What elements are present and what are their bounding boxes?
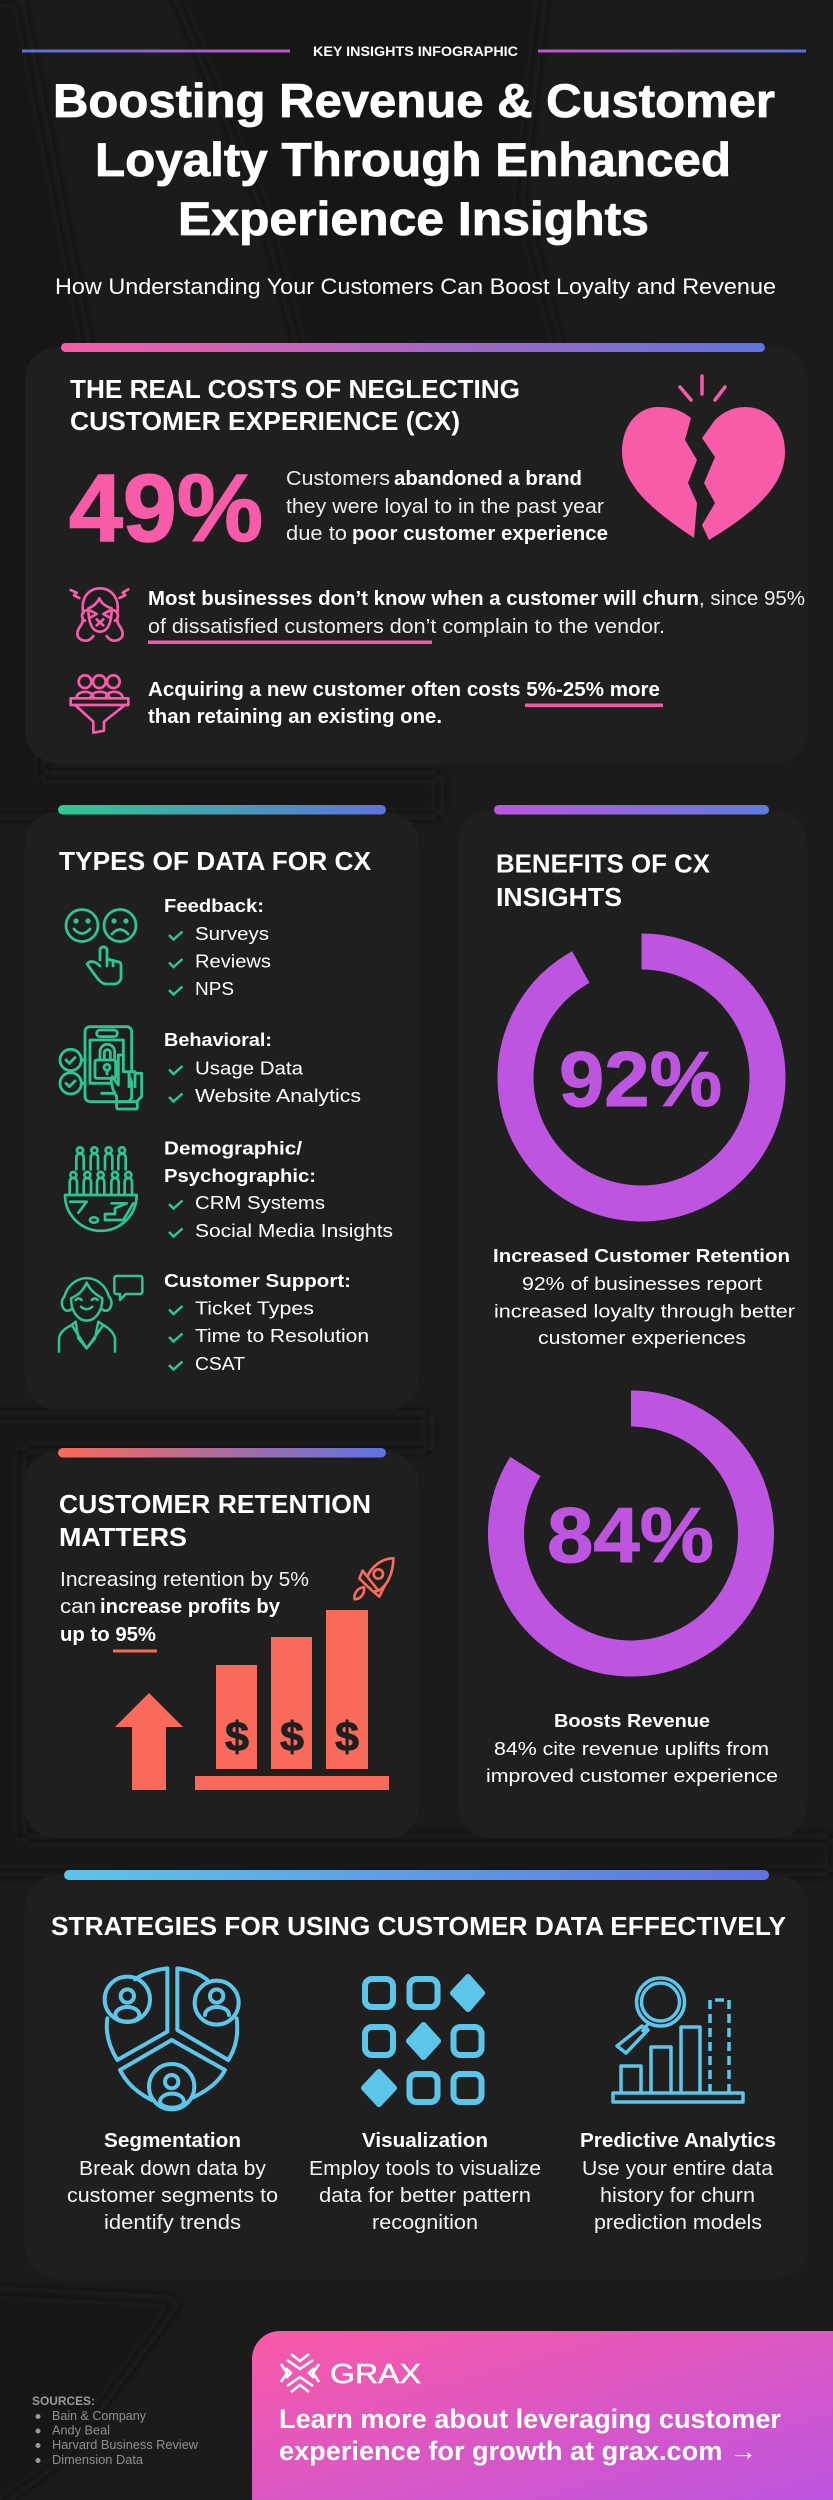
- panel: types of data: [25, 805, 419, 1410]
- icon: customer support: [59, 1276, 142, 1352]
- panel: real costs: [25, 343, 808, 763]
- callout: acquisition cost: [148, 679, 663, 728]
- heading: benefits: [496, 848, 711, 912]
- list: customer support: Ticket Types: [195, 1298, 314, 1318]
- callout: acquisition cost: than retaining an existing one.: [148, 706, 442, 728]
- text: predictive analytics: prediction models: [594, 2212, 762, 2234]
- icon: broken heart: [622, 376, 785, 540]
- text: predictive analytics: [580, 2130, 776, 2234]
- chart: 92% donut: 92%: [559, 1035, 722, 1123]
- text: boosts revenue: Boosts Revenue: [554, 1711, 710, 1731]
- text: segmentation: customer segments to: [67, 2185, 278, 2207]
- chart: 84% donut: 84%: [547, 1491, 714, 1579]
- heading: benefits: BENEFITS OF CX: [496, 848, 711, 878]
- list: feedback: Surveys: [195, 924, 269, 944]
- logo: GRAX: [281, 2354, 421, 2392]
- list: customer support: [164, 1271, 369, 1374]
- text: visualization: Visualization: [362, 2130, 488, 2152]
- icon: behavioral: [60, 1027, 142, 1109]
- callout: churn: [148, 588, 805, 644]
- heading: retention: [59, 1489, 371, 1552]
- text: boosts revenue: improved customer experience: [486, 1766, 778, 1786]
- heading: real costs: THE REAL COSTS OF NEGLECTING: [70, 376, 520, 404]
- icon: predictive analytics: [613, 1978, 743, 2102]
- text: customer retention: increased loyalty through better: [494, 1302, 795, 1322]
- title: [53, 74, 775, 245]
- callout: churn: Most businesses don’t know when a customer will churn: [148, 588, 699, 610]
- header label: KEY INSIGHTS INFOGRAPHIC: [313, 43, 518, 59]
- text: visualization: data for better pattern: [319, 2185, 531, 2207]
- sources: Andy Beal: [52, 2424, 110, 2438]
- icon: segmentation: [105, 1968, 239, 2109]
- stat description: due to: [286, 523, 347, 545]
- text: boosts revenue: 84% cite revenue uplifts from: [494, 1739, 769, 1759]
- list: behavioral: Usage Data: [195, 1058, 304, 1078]
- stat description: [286, 468, 608, 545]
- text: segmentation: [67, 2130, 278, 2234]
- header label: [22, 43, 806, 59]
- list: demographic: [164, 1138, 393, 1241]
- call to action text: experience for growth at grax.com →: [279, 2436, 757, 2466]
- panel: strategies: [25, 1870, 808, 2279]
- text: customer retention: customer experiences: [538, 1328, 746, 1348]
- text: visualization: Employ tools to visualize: [309, 2158, 541, 2180]
- text: visualization: recognition: [372, 2212, 478, 2234]
- heading: benefits: INSIGHTS: [496, 882, 622, 912]
- list: demographic: Demographic/: [164, 1138, 302, 1158]
- text: retention stat: can: [60, 1596, 96, 1618]
- stat description: poor customer experience: [352, 523, 608, 545]
- panel: customer retention: [24, 1448, 419, 1838]
- text: retention stat: [60, 1569, 309, 1652]
- chart: revenue bars: [195, 1610, 389, 1790]
- list: feedback: NPS: [195, 979, 234, 999]
- chart: revenue bars: $: [280, 1713, 304, 1760]
- text: retention stat: Increasing retention by 5%: [60, 1569, 309, 1591]
- icon: rocket: [354, 1558, 393, 1599]
- panel: benefits: [458, 805, 807, 1838]
- subtitle: How Understanding Your Customers Can Boost Loyalty and Revenue: [55, 274, 776, 299]
- heading: strategies: STRATEGIES FOR USING CUSTOMER DATA EFFECTIVELY: [51, 1911, 786, 1941]
- icon: feedback: [66, 910, 136, 984]
- list: behavioral: Behavioral:: [164, 1030, 272, 1050]
- list: feedback: Reviews: [195, 952, 271, 972]
- heading: real costs: CUSTOMER EXPERIENCE (CX): [70, 408, 460, 436]
- text: boosts revenue: [486, 1711, 778, 1786]
- list: demographic: CRM Systems: [195, 1193, 325, 1213]
- icon: customer funnel: [71, 675, 128, 733]
- text: customer retention: [493, 1246, 795, 1348]
- sources: Bain & Company: [52, 2409, 147, 2423]
- heading: types of data: TYPES OF DATA FOR CX: [59, 846, 372, 876]
- text: segmentation: identify trends: [104, 2212, 241, 2234]
- title: Boosting Revenue & Customer: [53, 74, 775, 127]
- icon: frustrated customer: [71, 588, 128, 641]
- stat description: they were loyal to in the past year: [286, 496, 604, 518]
- callout: acquisition cost: Acquiring a new customer often costs 5%-25% more: [148, 679, 660, 701]
- text: customer retention: Increased Customer Retention: [493, 1246, 790, 1266]
- icon: visualization: [364, 1977, 482, 2104]
- chart: revenue bars: $: [225, 1713, 249, 1760]
- call to action text: [279, 2404, 781, 2466]
- title: Experience Insights: [178, 192, 649, 245]
- list: behavioral: Website Analytics: [195, 1086, 361, 1106]
- list: feedback: [164, 896, 271, 999]
- call to action text: Learn more about leveraging customer: [279, 2404, 781, 2434]
- heading: real costs: [70, 376, 520, 436]
- list: feedback: Feedback:: [164, 896, 264, 916]
- text: customer retention: 92% of businesses report: [522, 1274, 762, 1294]
- text: segmentation: Break down data by: [79, 2158, 266, 2180]
- logo: GRAX: GRAX: [330, 2358, 421, 2389]
- list: customer support: Time to Resolution: [195, 1326, 369, 1346]
- list: customer support: Customer Support:: [164, 1271, 351, 1291]
- sources: [32, 2394, 199, 2467]
- heading: retention: CUSTOMER RETENTION: [59, 1489, 371, 1519]
- heading: retention: MATTERS: [59, 1522, 187, 1552]
- icon: up arrow: [115, 1693, 183, 1790]
- text: segmentation: Segmentation: [104, 2130, 241, 2152]
- text: retention stat: increase profits by: [100, 1596, 281, 1618]
- chart: 92% donut: [516, 952, 768, 1204]
- list: behavioral: [164, 1030, 361, 1106]
- stat: 49%: 49%: [69, 455, 263, 562]
- text: visualization: [309, 2130, 541, 2234]
- chart: revenue bars: $: [335, 1713, 359, 1760]
- stat description: abandoned a brand: [394, 468, 582, 490]
- text: retention stat: up to 95%: [60, 1624, 156, 1646]
- sources: SOURCES:: [32, 2394, 95, 2408]
- title: Loyalty Through Enhanced: [95, 133, 731, 186]
- callout: churn: , since 95%: [699, 588, 805, 610]
- text: predictive analytics: Use your entire data: [582, 2158, 774, 2180]
- sources: Dimension Data: [52, 2453, 143, 2467]
- chart: 84% donut: [506, 1408, 756, 1658]
- stat description: Customers: [286, 468, 390, 490]
- text: predictive analytics: Predictive Analytics: [580, 2130, 776, 2152]
- callout: churn: of dissatisfied customers don’t complain to the vendor.: [148, 616, 665, 638]
- list: demographic: Psychographic:: [164, 1166, 316, 1186]
- icon: demographic: [65, 1147, 137, 1231]
- call to action: [252, 2331, 833, 2500]
- list: demographic: Social Media Insights: [195, 1221, 393, 1241]
- text: predictive analytics: history for churn: [600, 2185, 755, 2207]
- sources: Harvard Business Review: [52, 2438, 199, 2452]
- list: customer support: CSAT: [195, 1354, 245, 1374]
